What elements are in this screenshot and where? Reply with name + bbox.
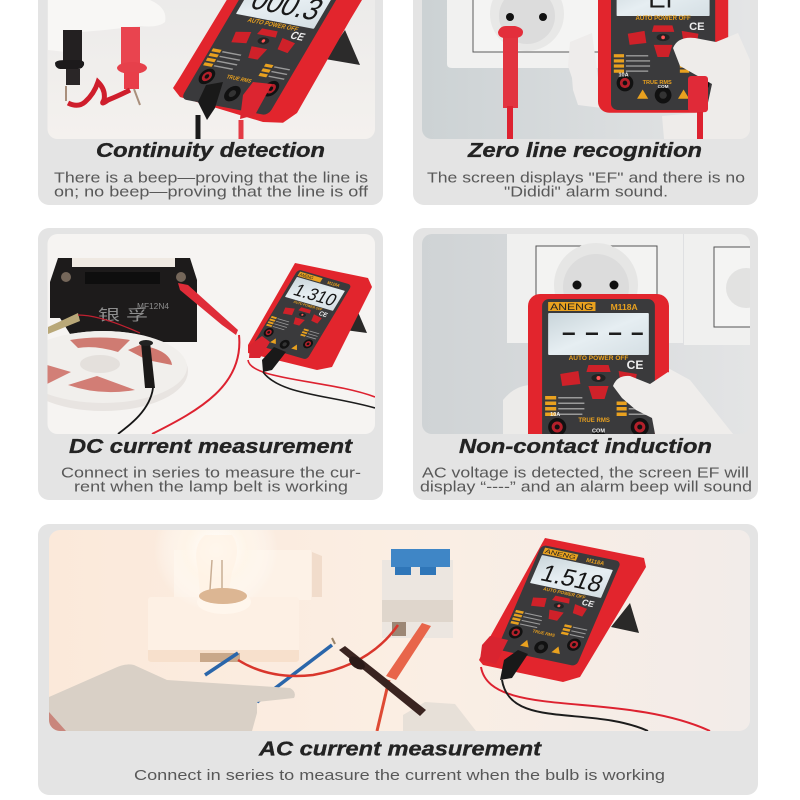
description <box>420 466 752 496</box>
photo: meter held near socket: COM <box>592 429 605 434</box>
photo: bulb circuit, breaker and meter: TRUE RMS <box>532 628 556 638</box>
photo: bulb circuit, breaker and meter: ANENG <box>544 548 577 561</box>
lcd reading: 1.518 <box>537 561 607 598</box>
photo: battery, LED reel and meter: MF12N4 <box>137 302 170 311</box>
photo: meter held near socket: ANENG <box>550 302 593 312</box>
photo: bulb circuit, breaker and meter: AUTO POWER OFF <box>542 586 586 600</box>
photo: meter held near socket: CE <box>627 358 643 372</box>
photo: bulb circuit, breaker and meter: CE <box>580 597 596 609</box>
panel: DC current measurement <box>18 228 383 500</box>
panel: zero line recognition <box>413 0 758 205</box>
heading: Continuity detection <box>96 140 325 162</box>
photo: meter held near socket: M118A <box>611 302 638 312</box>
photo: battery, LED reel and meter <box>18 234 375 434</box>
brand and model <box>543 548 578 561</box>
lcd reading: 1.310 <box>290 280 341 310</box>
photo: battery, LED reel and meter: 银 孚 <box>98 307 148 324</box>
photo: battery, LED reel and meter: AUTO POWER OFF <box>292 300 323 312</box>
photo: bulb circuit, breaker and meter: M118A <box>585 558 606 567</box>
photo: probes and meter beeping: CE <box>288 30 307 44</box>
photo: meter held near socket: AUTO POWER OFF <box>569 355 628 362</box>
photo: battery, LED reel and meter: M118A <box>326 280 341 288</box>
brand and model <box>548 302 595 311</box>
heading: Non-contact induction <box>459 436 712 458</box>
description: display “----” and an alarm beep will sound <box>420 480 752 496</box>
photo: meter held near socket: TRUE RMS <box>578 418 610 424</box>
photo: meter held near socket: 10A <box>550 412 560 418</box>
description: AC voltage is detected, the screen EF will <box>422 466 749 482</box>
heading: AC current measurement <box>258 738 543 760</box>
photo: battery, LED reel and meter: ANENG <box>298 272 315 280</box>
lcd dashes <box>563 332 643 335</box>
photo: probes and meter beeping: AUTO POWER OFF <box>246 17 300 33</box>
brand and model <box>298 272 323 282</box>
description: Connect in series to measure the current when the bulb is working <box>134 768 665 784</box>
heading: Zero line recognition <box>467 140 702 162</box>
description <box>427 170 745 200</box>
description <box>61 466 361 496</box>
photo: socket and meter showing EF <box>422 0 750 139</box>
photo: probes and meter beeping <box>47 0 375 139</box>
description <box>54 170 369 200</box>
panel: continuity detection <box>38 0 383 205</box>
photo: socket and meter showing EF: TRUE RMS <box>643 80 672 86</box>
photo: socket and meter showing EF: 10A <box>618 72 629 78</box>
description: The screen displays "EF" and there is no <box>427 170 745 186</box>
description: "Dididi" alarm sound. <box>504 184 668 200</box>
photo: socket and meter showing EF: COM <box>658 84 669 89</box>
description: There is a beep—proving that the line is <box>54 170 368 186</box>
panel: non-contact induction <box>413 228 766 500</box>
photo: battery, LED reel and meter: CE <box>317 310 329 319</box>
heading: DC current measurement <box>69 436 354 458</box>
description: Connect in series to measure the cur- <box>61 466 361 482</box>
photo: socket and meter showing EF: CE <box>689 21 705 33</box>
description: rent when the lamp belt is working <box>74 480 348 496</box>
photo: meter held near socket <box>422 234 750 434</box>
photo: bulb circuit, breaker and meter <box>49 530 750 731</box>
photo: probes and meter beeping: TRUE RMS <box>225 74 253 85</box>
description: on; no beep—proving that the line is off <box>54 184 369 200</box>
photo: socket and meter showing EF: AUTO POWER OFF <box>636 16 691 22</box>
panel: AC current measurement <box>38 524 758 795</box>
